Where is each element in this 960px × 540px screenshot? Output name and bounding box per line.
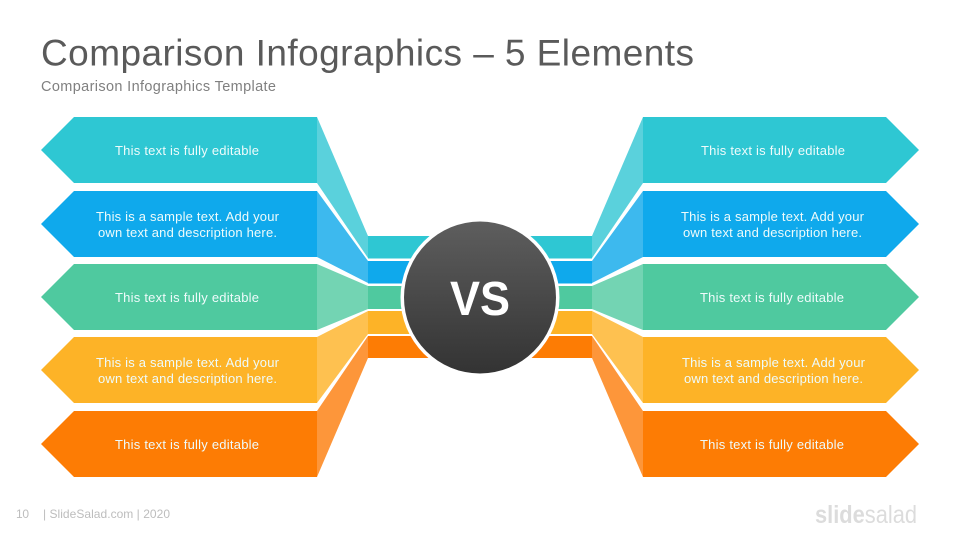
left arrow 3: green	[41, 264, 448, 330]
left arrow 2: blue: This is a sample text. Add your	[96, 209, 280, 224]
right arrow 4: amber: own text and description here.	[684, 371, 863, 386]
left arrow 1: teal: This text is fully editable	[115, 143, 259, 158]
right arrow 1: teal	[512, 117, 919, 258]
left arrow 4: amber	[41, 311, 448, 403]
left arrow 3: green: This text is fully editable	[115, 290, 259, 305]
right arrow 2: blue: own text and description here.	[683, 225, 862, 240]
right arrow 2: blue: This is a sample text. Add your	[681, 209, 865, 224]
right column: five arrow labels	[512, 117, 919, 477]
center VS badge: VS	[450, 273, 510, 326]
center VS badge	[400, 218, 560, 377]
logo wordmark: slidesalad	[815, 501, 917, 529]
left arrow 5: orange: This text is fully editable	[115, 437, 259, 452]
footer page number: 10	[16, 507, 29, 521]
left arrow 4: amber: This is a sample text. Add your	[96, 355, 280, 370]
right arrow 3: green: This text is fully editable	[700, 290, 844, 305]
right arrow 1: teal: This text is fully editable	[701, 143, 845, 158]
right arrow 5: orange	[512, 336, 919, 477]
right arrow 4: amber	[512, 311, 919, 403]
left arrow 2: blue	[41, 191, 448, 284]
left arrow 5: orange	[41, 336, 448, 477]
footer credit: | SlideSalad.com | 2020	[43, 507, 170, 521]
right arrow 3: green	[512, 264, 919, 330]
right arrow 2: blue	[512, 191, 919, 284]
right arrow 4: amber: This is a sample text. Add your	[682, 355, 866, 370]
left column: five arrow labels	[41, 117, 448, 477]
left arrow 4: amber: own text and description here.	[98, 371, 277, 386]
subtitle: Comparison Infographics Template	[41, 79, 276, 95]
left arrow 1: teal	[41, 117, 448, 258]
left arrow 2: blue: own text and description here.	[98, 225, 277, 240]
right arrow 5: orange: This text is fully editable	[700, 437, 844, 452]
title: Comparison Infographics – 5 Elements	[41, 32, 694, 74]
